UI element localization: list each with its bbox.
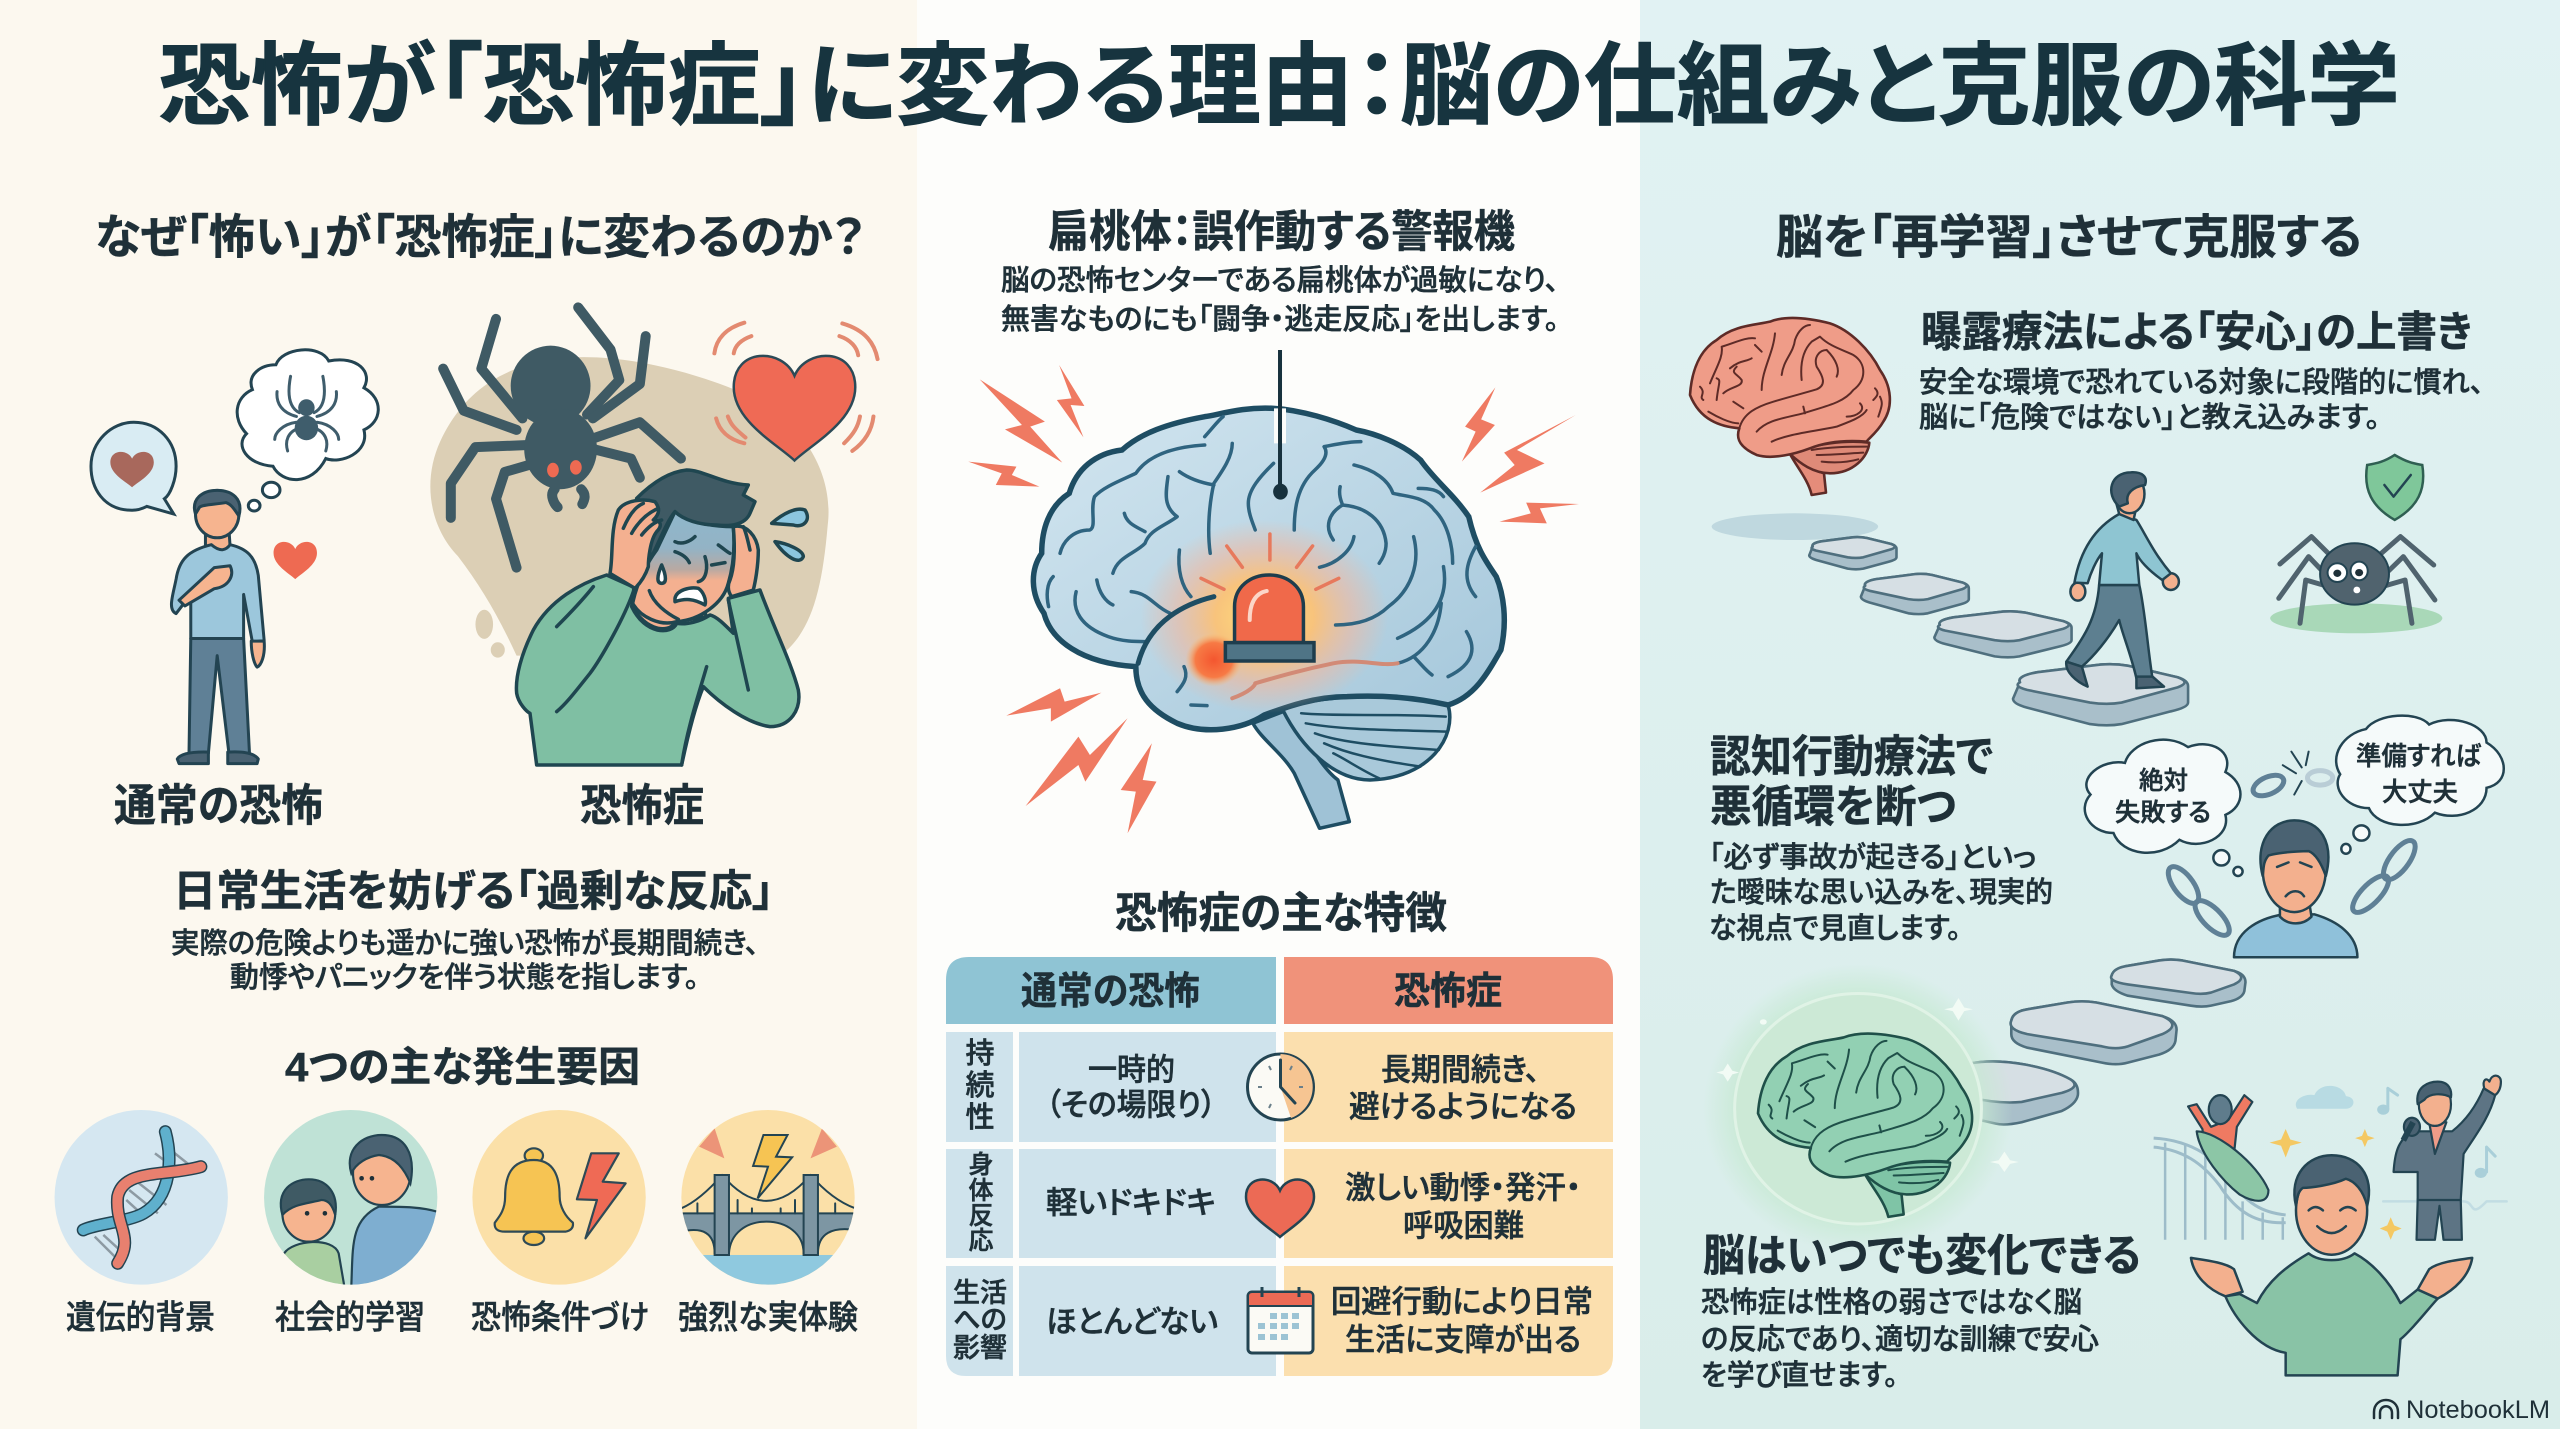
icon: stepping stones (1809, 537, 2188, 725)
subheading: CBT: 悪循環を断つ (1710, 782, 1956, 832)
thought text: always fail (2115, 767, 2211, 827)
text block: brain can change (1701, 1286, 2099, 1392)
thought text: prepared is fine: 大丈夫 (2382, 777, 2458, 807)
table row: body reaction: 体 (968, 1177, 994, 1205)
text block: explanation (171, 927, 759, 994)
icon: social learning (264, 1110, 442, 1287)
thought text: prepared is fine: 準備すれば (2356, 741, 2482, 771)
icon: sparkles (2270, 1129, 2402, 1240)
icon: small heart (274, 542, 317, 579)
text block: brain can change: 恐怖症は性格の弱さではなく脳 (1701, 1286, 2082, 1319)
text block: CBT: た曖昧な思い込みを、現実的 (1710, 876, 2053, 909)
text block: CBT: 「必ず事故が起きる」といっ (1709, 841, 2036, 874)
text block: brain can change: の反応であり、適切な訓練で安心 (1701, 1323, 2099, 1356)
illustration: brain with alarm (968, 350, 1579, 833)
text block: exposure therapy (1919, 366, 2484, 434)
label: phobia: 恐怖症 (580, 782, 704, 830)
table row: body reaction: 呼吸困難 (1403, 1208, 1524, 1244)
panel: amygdala (946, 208, 1613, 1376)
icon: green brain (1758, 1034, 1972, 1217)
icon: bridge and lightning (681, 1110, 855, 1287)
figure: standing person (171, 490, 264, 764)
decor: cloud (2296, 1086, 2354, 1109)
figure: singer (2394, 1076, 2501, 1240)
label: social learning: 社会的学習 (275, 1298, 425, 1336)
illustration: stepping stones and walker (1712, 455, 2442, 725)
comparison table (946, 957, 1613, 1376)
table row: life impact: への (953, 1305, 1007, 1335)
text block: CBT (1709, 841, 2053, 945)
subheading: CBT: 認知行動療法で (1710, 732, 1993, 782)
table row: body reaction: 反 (968, 1202, 994, 1230)
table row: body reaction: 応 (968, 1227, 994, 1255)
figure: walking person (2066, 472, 2179, 688)
table row: body reaction: 軽いドキドキ (1046, 1186, 1216, 1220)
table row: duration: 長期間続き、 (1381, 1052, 1540, 1088)
decor: shadow ellipse (1712, 513, 1878, 540)
thought text: always fail: 失敗する (2115, 799, 2211, 827)
table header: normal fear (946, 957, 1276, 1024)
thought text: always fail: 絶対 (2139, 767, 2188, 795)
icon: glowing green halo (1703, 964, 2019, 1253)
text block: explanation: 動悸やパニックを伴う状態を指します。 (230, 961, 699, 994)
label: intense experience: 強烈な実体験 (678, 1298, 858, 1336)
icon: thought cloud negative (2085, 740, 2243, 876)
NotebookLM logo: NotebookLM (2406, 1396, 2550, 1424)
background: centre panel (917, 0, 1640, 1429)
subheading: main features: 恐怖症の主な特徴 (1115, 890, 1447, 938)
icon: thought cloud with spider (237, 350, 378, 511)
text block: amygdala description (1001, 264, 1559, 336)
icon: broken chains (2162, 752, 2421, 939)
table row: body reaction: 身 (968, 1151, 994, 1179)
panel: relearning (1690, 210, 2507, 1392)
brain stem and cerebellum (1253, 697, 1450, 828)
table header: phobia: 恐怖症 (1394, 971, 1502, 1013)
text block: explanation: 実際の危険よりも遥かに強い恐怖が長期間続き、 (171, 927, 759, 960)
table row: body reaction: 激しい動悸・発汗・ (1345, 1170, 1581, 1206)
table row: life impact: 回避行動により日常 (1331, 1284, 1593, 1320)
brain folds (1047, 417, 1476, 706)
subheading: brain can change: 脳はいつでも変化できる (1703, 1232, 2141, 1280)
icon: heart (1246, 1180, 1314, 1237)
figure: happy man (2191, 1155, 2472, 1375)
text block: brain can change: を学び直せます。 (1701, 1359, 1898, 1392)
icon: lightning bolts (968, 365, 1579, 833)
icon: lower stepping stones (1970, 960, 2245, 1125)
text block: exposure therapy: 安全な環境で恐れている対象に段階的に慣れ、 (1919, 366, 2484, 399)
brain body (1033, 408, 1504, 730)
table row: duration: 続 (965, 1069, 995, 1102)
illustration: enjoying life (2154, 1076, 2507, 1375)
table row: duration: 持 (965, 1037, 995, 1070)
icon: pounding heart (714, 323, 878, 460)
subheading: CBT (1710, 732, 1993, 832)
panel: why fear becomes phobia (55, 210, 878, 1336)
table header: phobia (1284, 957, 1613, 1024)
icon: friendly spider (2270, 537, 2442, 633)
text block: exposure therapy: 脳に「危険ではない」と教え込みます。 (1919, 401, 2380, 434)
figure: worried person (2234, 820, 2357, 957)
cause icons row (55, 1110, 855, 1287)
heading: left column: なぜ「怖い」が「恐怖症」に変わるのか？ (95, 210, 865, 264)
icon: DNA (55, 1110, 228, 1285)
icon: clock (1248, 1054, 1314, 1120)
text block: CBT: な視点で見直します。 (1709, 912, 1961, 945)
text block: amygdala description: 脳の恐怖センターである扁桃体が過敏になり、 (1001, 264, 1559, 297)
heading: amygdala: 扁桃体：誤作動する警報機 (1048, 208, 1515, 256)
table row: life impact: 生活 (953, 1278, 1007, 1308)
icon: bell and lightning (472, 1110, 646, 1285)
table row: duration: （その場限り） (1046, 1088, 1216, 1122)
table row: duration: 避けるようになる (1349, 1090, 1577, 1124)
background: right panel (1640, 0, 2560, 1429)
subheading: four causes: 4つの主な発生要因 (285, 1044, 640, 1090)
table row: duration: 性 (965, 1101, 995, 1134)
label: genetic background: 遺伝的背景 (66, 1298, 215, 1336)
label: normal fear: 通常の恐怖 (114, 782, 323, 830)
icon: amygdala hot spot (1185, 633, 1242, 687)
illustration: CBT thoughts and stones (1703, 716, 2504, 1253)
table row: life impact (946, 1266, 1613, 1376)
table row: duration (946, 1032, 1613, 1142)
table row: life impact: ほとんどない (1046, 1304, 1218, 1340)
icon: pink brain (1690, 318, 1890, 495)
decor: beige blob (430, 357, 829, 658)
table row: life impact: 生活に支障が出る (1345, 1322, 1581, 1358)
illustration: normal fear person (91, 350, 378, 764)
table row: life impact: 影響 (953, 1333, 1007, 1363)
subheading: excessive reaction: 日常生活を妨げる「過剰な反応」 (173, 868, 774, 916)
table header: normal fear: 通常の恐怖 (1021, 971, 1200, 1013)
label: fear conditioning: 恐怖条件づけ (471, 1298, 649, 1336)
subheading: exposure therapy: 曝露療法による「安心」の上書き (1921, 308, 2472, 356)
title: 恐怖が「恐怖症」に変わる理由：脳の仕組みと克服の科学 (158, 37, 2400, 137)
heading: right column: 脳を「再学習」させて克服する (1776, 210, 2362, 264)
icon: roller coaster (2154, 1095, 2286, 1240)
illustration: phobia scene (430, 307, 878, 658)
text block: amygdala description: 無害なものにも「闘争・逃走反応」を出します。 (1001, 303, 1559, 336)
brain glow (1140, 520, 1388, 713)
background: left panel (0, 0, 917, 1429)
icon: green shield (2366, 455, 2423, 520)
pointer line (1273, 350, 1288, 500)
thought text: prepared is fine (2356, 741, 2482, 807)
icon: big spider (443, 307, 681, 568)
icon: alarm siren (1201, 534, 1339, 661)
table row: body reaction (946, 1149, 1613, 1258)
icon: calendar (1248, 1287, 1313, 1353)
icon: music notes (2379, 1088, 2507, 1209)
figure: distressed man (516, 470, 807, 765)
icon: thought cloud positive (2336, 716, 2504, 854)
icon: speech bubble with heart (91, 422, 176, 514)
table row: duration: 一時的 (1088, 1052, 1175, 1088)
